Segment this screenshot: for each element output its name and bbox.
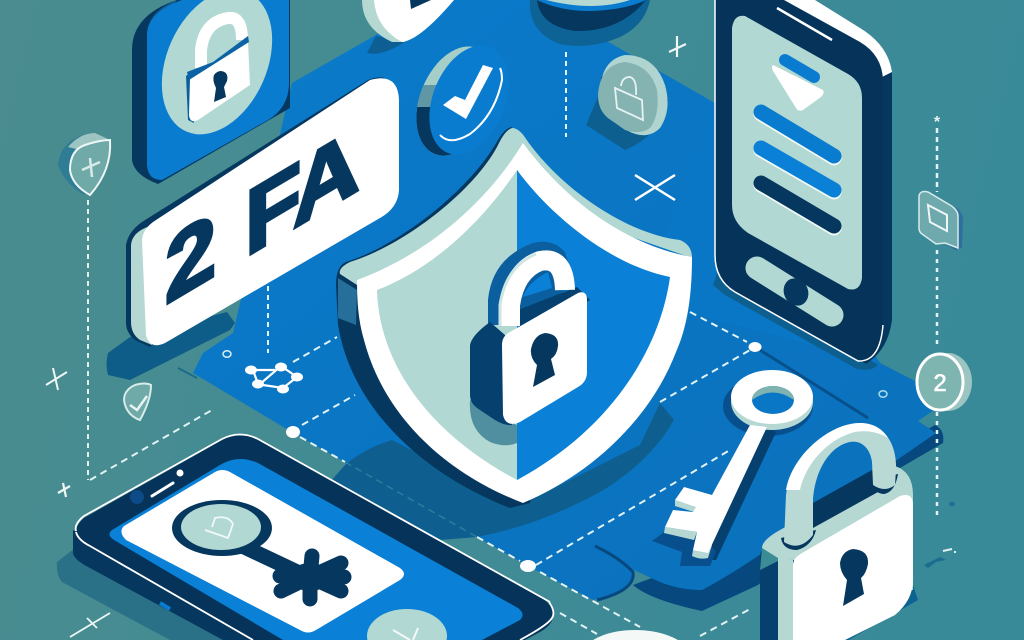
bottom edge dashed — [540, 572, 640, 627]
padlock dark side — [760, 535, 800, 640]
badge mint side — [401, 35, 511, 167]
lobe groove — [595, 546, 633, 600]
key head thickness — [731, 374, 813, 430]
right upper dashed — [690, 312, 747, 342]
dot centre bottom — [520, 560, 536, 572]
badge side — [924, 353, 972, 411]
screen bar highlights — [761, 114, 834, 228]
key head — [731, 370, 813, 424]
platform surface — [193, 0, 937, 600]
key — [652, 370, 813, 566]
cross line bottom left — [70, 613, 110, 637]
padlock teal side — [760, 537, 800, 570]
padlock shackle — [784, 423, 896, 546]
phone right side — [860, 72, 892, 364]
card mint circle — [140, 0, 294, 152]
lock side — [470, 322, 512, 425]
phone edge highlight — [715, 0, 883, 361]
lock outline icon — [615, 77, 643, 120]
lock icon body — [615, 88, 643, 120]
left shield badge — [58, 133, 110, 195]
icon mint side — [362, 0, 405, 42]
badge face — [917, 354, 963, 410]
phone screen — [109, 459, 523, 640]
disk blue rim — [537, 0, 646, 11]
phone sensor dot — [176, 470, 184, 476]
small dots right — [949, 502, 955, 506]
shield white face — [357, 143, 692, 503]
dot diagonal dashed — [302, 395, 355, 425]
phone top edge highlight — [76, 434, 550, 602]
small marks white — [943, 549, 956, 552]
phone shadow — [713, 270, 878, 370]
bottom left phone — [57, 434, 553, 640]
connector dashed lines — [88, 52, 937, 636]
left diagonal dashed line — [90, 410, 212, 480]
bottom side button — [160, 603, 170, 609]
centre-left dashed vertical — [267, 277, 269, 353]
chat face — [919, 192, 958, 248]
key ring — [172, 500, 272, 556]
padlock shackle highlight — [786, 423, 888, 490]
chat side — [930, 207, 963, 250]
plate dark back — [126, 77, 385, 347]
home button tick — [393, 628, 418, 640]
network nodes icon — [245, 362, 303, 394]
phone home button — [779, 274, 813, 310]
badge number: 2 — [933, 370, 947, 397]
badge mint top — [68, 133, 110, 150]
padlock mint front — [778, 557, 793, 640]
small check shield — [124, 384, 151, 420]
node 3 — [291, 372, 303, 382]
top blue disk — [530, 0, 650, 46]
right dashed middle — [936, 250, 938, 345]
speaker slot — [152, 483, 173, 496]
lock shadow — [470, 400, 517, 445]
blue isometric platform — [178, 0, 943, 611]
number 2 badge — [917, 353, 972, 411]
shield lock — [470, 242, 590, 425]
phone white top edge — [783, 0, 892, 78]
screen bar 1 — [761, 112, 834, 156]
shield extruded body — [336, 127, 560, 508]
check tick — [443, 65, 493, 119]
lock keyhole — [531, 333, 558, 387]
plus mark top — [669, 36, 686, 57]
node 2 — [275, 362, 287, 372]
shield shadow — [330, 403, 674, 540]
blue padlock card — [132, 0, 294, 184]
shield mint top band — [340, 128, 692, 285]
bottom short dashed — [560, 613, 597, 634]
key stem — [240, 545, 310, 578]
connector dots — [286, 342, 762, 572]
phone depth — [73, 530, 280, 640]
key shaft shadow — [700, 427, 776, 560]
small padlock badge — [586, 55, 668, 150]
badge dark band — [416, 107, 452, 156]
key bit thickness — [664, 500, 712, 559]
screen white triangle — [772, 65, 824, 111]
phone face — [76, 435, 553, 640]
padlock shackle — [201, 18, 242, 68]
shield inner left half — [377, 170, 517, 480]
right groove line — [760, 350, 868, 418]
lock body — [502, 292, 587, 424]
badge teal band — [417, 85, 436, 107]
badge face — [70, 140, 110, 195]
lock icon shackle — [621, 77, 636, 95]
small marks right — [924, 557, 946, 568]
long diagonal dashed — [536, 450, 730, 565]
left vertical dashed line — [87, 200, 89, 480]
node 1 — [245, 366, 257, 374]
plus mark lower left — [58, 483, 70, 497]
large bottom padlock — [760, 423, 918, 640]
X mark — [635, 175, 675, 200]
heading: 2 FA: 2 FA — [165, 107, 359, 325]
check mark badge — [416, 46, 508, 156]
top white icon — [362, 0, 454, 54]
small ring right — [879, 391, 887, 397]
padlock shackle base dark — [781, 474, 898, 550]
lock dark band — [518, 287, 590, 340]
lock shackle — [510, 260, 565, 326]
white panel — [121, 470, 404, 632]
key head shadow — [723, 376, 813, 436]
node links — [253, 366, 297, 388]
main shield — [336, 127, 692, 508]
screen bar 2 — [761, 148, 834, 190]
padlock keyhole — [213, 71, 227, 102]
dot right — [748, 342, 762, 352]
plate white face — [142, 78, 399, 345]
phone shadow — [57, 548, 235, 640]
home button — [367, 609, 447, 640]
key hole rim — [752, 386, 794, 400]
dot left — [286, 426, 300, 438]
node 5 — [277, 384, 289, 394]
small ring left — [223, 351, 231, 357]
2FA plate — [126, 77, 399, 347]
2FA plate shadow — [106, 312, 235, 380]
key ring mint centre — [181, 504, 261, 550]
phone lower edge highlight — [76, 532, 253, 640]
platform right surface fill — [640, 103, 880, 363]
shield inner right half — [517, 170, 670, 480]
badge lower sides — [416, 85, 452, 156]
lower left edge dashed — [300, 437, 345, 462]
key snowflake hub — [289, 563, 331, 591]
bottom right dashed — [700, 608, 752, 636]
plate mint side — [131, 226, 152, 345]
check shield tick — [130, 396, 147, 410]
icon white face — [374, 0, 454, 42]
phone home pill — [757, 268, 832, 315]
padlock side — [186, 72, 194, 123]
lock shackle back — [488, 242, 575, 325]
asterisk mark: * — [934, 114, 941, 131]
card side — [132, 0, 290, 184]
lock gap — [523, 272, 552, 297]
icon shadow — [367, 36, 405, 54]
bottom centre white coin — [593, 630, 678, 640]
badge mint body — [600, 55, 668, 135]
check shield face — [124, 384, 151, 420]
key body — [665, 425, 767, 553]
chat square icon — [919, 192, 963, 250]
badge mark — [82, 158, 100, 177]
node 4 — [252, 380, 264, 388]
upper diagonal dashed — [660, 350, 750, 402]
badge face — [414, 34, 524, 166]
padlock mint top — [762, 466, 913, 590]
edge dashed to dot — [477, 537, 520, 561]
disk mint centre — [546, 0, 630, 6]
key hole — [752, 386, 794, 414]
badge side — [58, 133, 100, 195]
padlock dark band — [813, 470, 878, 528]
badge shadow — [586, 78, 662, 150]
plus mark left — [46, 368, 67, 390]
shield teal side — [338, 278, 357, 325]
padlock shadow — [830, 585, 918, 640]
badge face — [598, 62, 658, 132]
right dashed lower — [936, 412, 938, 517]
lock shackle shade — [500, 254, 536, 326]
key snowflake teeth — [280, 556, 344, 599]
card top highlight — [147, 0, 177, 60]
disk shadow — [530, 0, 650, 46]
top centre dashed — [565, 52, 567, 137]
phone screen — [732, 16, 862, 290]
disk dark side — [537, 0, 646, 31]
key ring mark — [205, 517, 233, 538]
padlock keyhole — [840, 549, 868, 606]
left groove line — [178, 368, 197, 378]
key bit shadow — [652, 520, 716, 566]
node diagonal dashed — [293, 337, 337, 362]
padlock body — [189, 42, 250, 121]
padlock top strip — [187, 36, 249, 80]
faint edge dashed — [345, 462, 477, 537]
chat square — [928, 205, 947, 231]
badge ring — [440, 68, 502, 140]
phone camera — [130, 490, 144, 504]
screen bar 3 — [761, 183, 834, 226]
card face — [147, 0, 289, 180]
phone speaker — [777, 8, 832, 40]
badge back — [601, 58, 668, 135]
top right phone — [713, 0, 892, 370]
phone right corner highlight — [520, 602, 553, 640]
platform thickness — [633, 425, 943, 611]
right dashed upper — [936, 128, 938, 192]
node points — [245, 362, 303, 394]
icon dark mark — [410, 0, 431, 9]
phone front — [715, 0, 883, 362]
screen blue tab — [785, 60, 814, 77]
padlock white face — [793, 495, 913, 640]
